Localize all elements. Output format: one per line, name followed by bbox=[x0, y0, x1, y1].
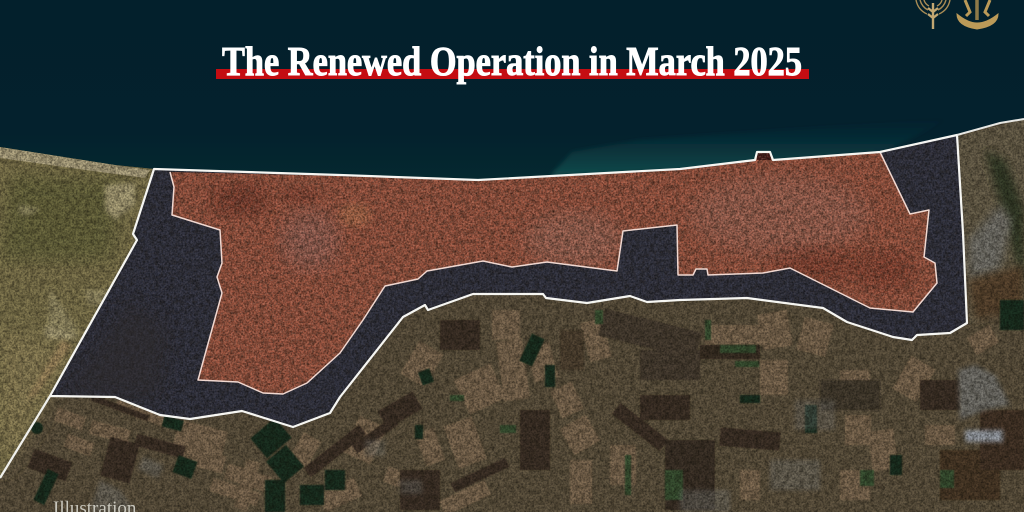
farmland base bbox=[0, 115, 1024, 512]
northern border line bbox=[957, 119, 1024, 135]
fields: dark green bbox=[31, 300, 1024, 512]
shallow coastal water bbox=[550, 118, 950, 176]
icon: military emblem bbox=[957, 0, 998, 29]
sea bbox=[0, 0, 1024, 190]
icon: antenna emblem bbox=[916, 0, 950, 29]
towns bbox=[90, 365, 1010, 512]
fields: mid green bbox=[450, 310, 954, 500]
fields: tan bbox=[54, 310, 999, 512]
buffer zone bbox=[50, 135, 967, 427]
land texture bbox=[0, 115, 1024, 512]
title underline bbox=[216, 69, 809, 79]
title: The Renewed Operation in March 2025 bbox=[222, 38, 802, 84]
land mottling bbox=[0, 115, 1024, 512]
red zone outline bbox=[170, 152, 937, 394]
desert area bbox=[0, 119, 1024, 512]
right side terrain bbox=[958, 119, 1024, 325]
coastal sand strip bbox=[0, 147, 150, 178]
pale dunes bbox=[18, 183, 135, 340]
fields: dark brown bbox=[28, 308, 1024, 510]
coast and border outline bbox=[50, 135, 967, 427]
western border line bbox=[0, 396, 50, 478]
red zone bbox=[170, 152, 937, 394]
